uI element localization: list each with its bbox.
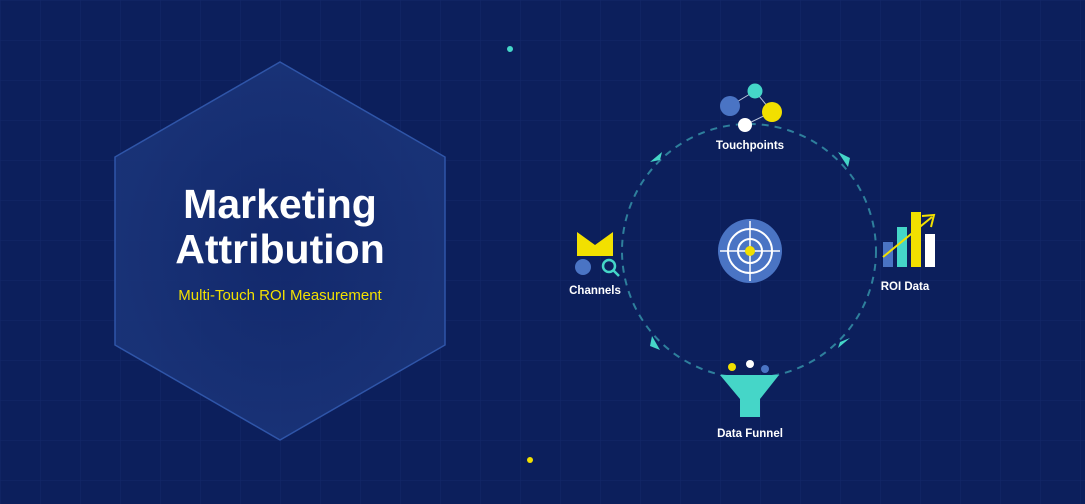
label: touchpoints: Touchpoints	[716, 140, 784, 152]
icon: touchpoints	[720, 84, 782, 132]
label: ROI data: ROI Data	[881, 281, 930, 293]
cycle ring	[622, 124, 876, 378]
label: data funnel: Data Funnel	[717, 428, 783, 440]
subtitle: Multi-Touch ROI Measurement	[178, 287, 383, 304]
icon: target	[718, 219, 782, 283]
icon: ROI bar chart	[883, 212, 935, 267]
title line 2: Attribution	[175, 226, 385, 272]
hexagon panel	[115, 62, 445, 440]
icon: funnel	[720, 360, 779, 417]
decorative dot yellow	[527, 457, 533, 463]
icon: channels	[575, 232, 619, 276]
title: Marketing	[183, 181, 377, 227]
decorative dot teal	[507, 46, 513, 52]
label: channels: Channels	[569, 285, 621, 297]
